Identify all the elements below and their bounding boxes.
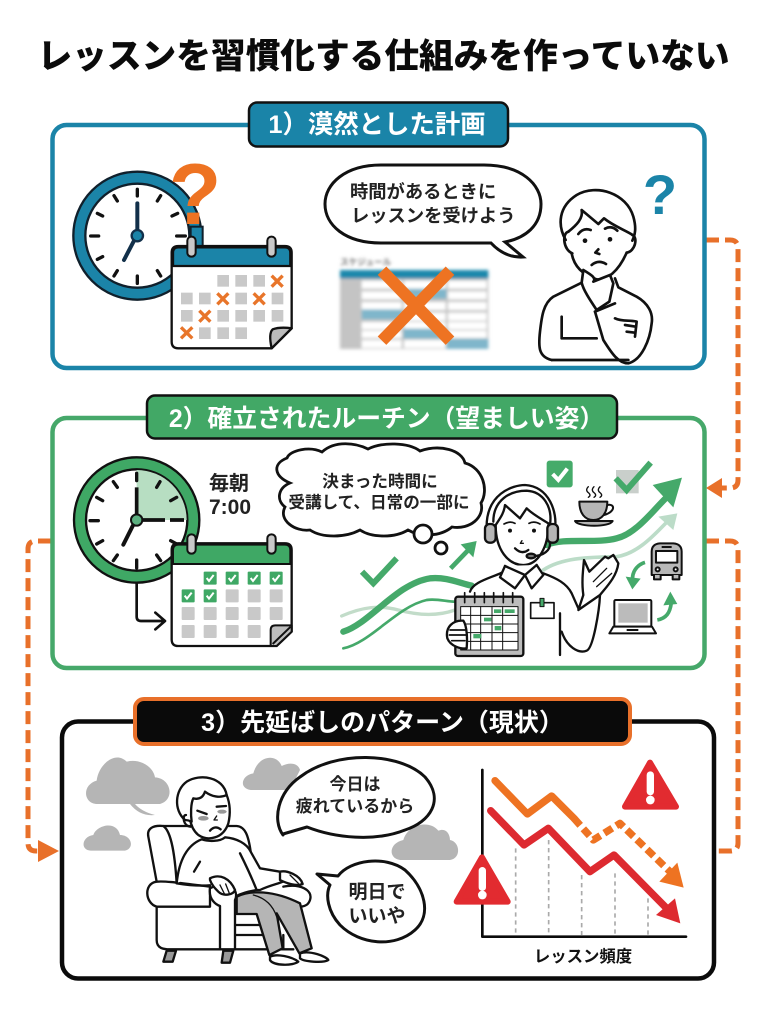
speech bubble: tomorrow is fine (317, 861, 425, 942)
icon: clock, calendar and arrow (74, 457, 292, 646)
person with headset and calendar (447, 485, 618, 656)
icon: teal question mark: ? (643, 163, 677, 226)
rising green trend lines (342, 478, 682, 648)
gray clouds (84, 758, 458, 860)
every morning 7:00 label: 毎朝 (209, 472, 249, 495)
thought cloud (277, 444, 484, 554)
chart axis label: レッスン頻度 (534, 947, 632, 966)
panel 3: procrastination (62, 699, 714, 978)
speech bubble: tired today: 疲れているから (296, 796, 414, 816)
connector: panel 1 to panel 2 (706, 240, 738, 498)
heading 3 (135, 699, 630, 744)
green check box (547, 461, 573, 487)
speech bubble: vague plan (325, 165, 541, 257)
heading 3: 3）先延ばしのパターン（現状） (201, 709, 564, 737)
thought cloud: 決まった時間に (322, 472, 438, 491)
every morning 7:00 label (209, 472, 251, 519)
gray check box (616, 463, 651, 493)
small green cycle arrows (626, 562, 677, 620)
heading 1 (249, 102, 508, 146)
tired person in armchair (147, 777, 328, 965)
speech bubble: tomorrow is fine: 明日で (348, 882, 406, 903)
heading 2: 2）確立されたルーチン（望ましい姿） (169, 405, 604, 433)
crossed out schedule: スケジュール (340, 257, 392, 267)
panel 1: vague plan (52, 102, 714, 978)
thought cloud: 受講して、日常の一部に (288, 493, 470, 512)
speech bubble: tomorrow is fine: いいや (348, 905, 406, 927)
icon: orange question mark: ? (169, 147, 221, 243)
speech bubble: vague plan: レッスンを受けよう (351, 205, 516, 226)
worried person (539, 190, 652, 363)
icon: laptop (609, 600, 656, 633)
heading 1: 1）漠然とした計画 (268, 111, 486, 139)
panel 2: established routine (52, 396, 714, 978)
connector: panel 2 to panel 3 left (28, 541, 59, 862)
icon: clock and calendar with question mark (73, 172, 292, 348)
speech bubble: tired today: 今日は (330, 774, 380, 794)
connector: panel 2 to panel 3 right (706, 541, 738, 851)
title: レッスンを習慣化する仕組みを作っていない (37, 37, 730, 76)
every morning 7:00 label: 7:00 (209, 496, 251, 519)
icon: coffee cup (575, 487, 613, 526)
icon: warning triangle upper (625, 763, 676, 807)
speech bubble: tired today (278, 757, 434, 837)
icon: bus (652, 543, 682, 579)
icon: warning triangle lower (457, 857, 508, 902)
heading 2 (147, 396, 617, 438)
line chart: lesson frequency (482, 770, 686, 937)
crossed out schedule (340, 257, 488, 349)
speech bubble: vague plan: 時間があるときに (350, 181, 496, 202)
